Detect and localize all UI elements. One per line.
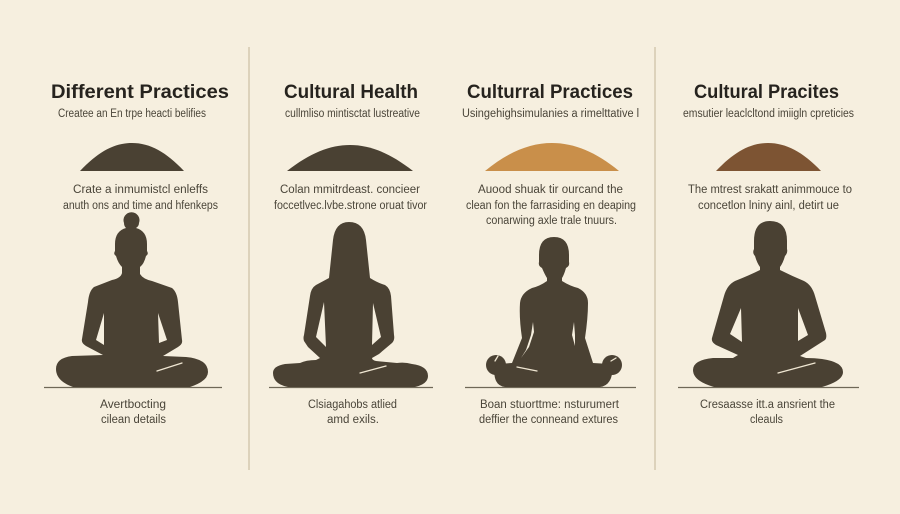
description text: Colan mmitrdeast. concieer xyxy=(280,184,420,196)
icon: ochre dome xyxy=(485,143,619,171)
caption: cilean details xyxy=(101,414,166,426)
description text: anuth ons and time and hfenkeps xyxy=(63,200,218,212)
icon: dark dome xyxy=(287,145,413,171)
subheading: cullmliso mintisctat lustreative xyxy=(285,108,420,120)
subheading: Createe an En trpe heacti belifies xyxy=(58,108,206,120)
caption: deffier the conneand extures xyxy=(479,414,618,426)
icon: dark dome xyxy=(80,143,184,171)
caption xyxy=(479,399,620,426)
panel: cultural health xyxy=(269,82,433,426)
figure: meditating person with hair bun xyxy=(56,212,208,387)
description text: Crate a inmumistcl enleffs xyxy=(73,184,208,196)
subheading: emsutier leaclcltond imiigln cpreticies xyxy=(683,108,854,120)
description text: conarwing axle trale tnuurs. xyxy=(486,215,617,227)
caption xyxy=(700,399,835,426)
caption: Boan stuorttme: nsturumert xyxy=(480,399,620,411)
description text: concetlon lniny ainl, detirt ue xyxy=(698,200,839,212)
heading: cultural pracites: Cultural Pracites xyxy=(694,82,839,103)
caption: Cresaasse itt.a ansrient the xyxy=(700,399,835,411)
figure: meditating person with hands on knees xyxy=(486,237,622,387)
heading: cultural practices: Culturral Practices xyxy=(467,82,633,103)
panel: cultural practices xyxy=(462,82,639,426)
icon: brown dome xyxy=(716,143,821,171)
panel: different practices xyxy=(44,82,229,426)
caption xyxy=(308,399,397,426)
heading: cultural health: Cultural Health xyxy=(284,82,418,103)
panel: cultural pracites xyxy=(678,82,859,426)
caption xyxy=(100,399,166,426)
description text xyxy=(688,184,852,212)
figure: meditating person with long hair xyxy=(273,222,428,387)
description text: clean fon the farrasiding en deaping xyxy=(466,200,636,212)
ground line xyxy=(465,386,636,388)
description text: foccetlvec.lvbe.strone oruat tivor xyxy=(274,200,427,212)
figure: meditating man xyxy=(693,221,843,387)
caption: cleauls xyxy=(750,414,783,426)
ground line xyxy=(269,386,433,388)
description text xyxy=(466,184,636,227)
description text: The mtrest srakatt animmouce to xyxy=(688,184,852,196)
heading: different practices: Different Practices xyxy=(51,82,229,103)
description text: Auood shuak tir ourcand the xyxy=(478,184,623,196)
caption: amd exils. xyxy=(327,414,379,426)
caption: Clsiagahobs atlied xyxy=(308,399,397,411)
subheading: Usingehighsimulanies a rimelttative l xyxy=(462,108,639,120)
description text xyxy=(274,184,427,212)
caption: Avertbocting xyxy=(100,399,166,411)
ground line xyxy=(678,386,859,388)
description text xyxy=(63,184,218,212)
ground line xyxy=(44,386,222,388)
